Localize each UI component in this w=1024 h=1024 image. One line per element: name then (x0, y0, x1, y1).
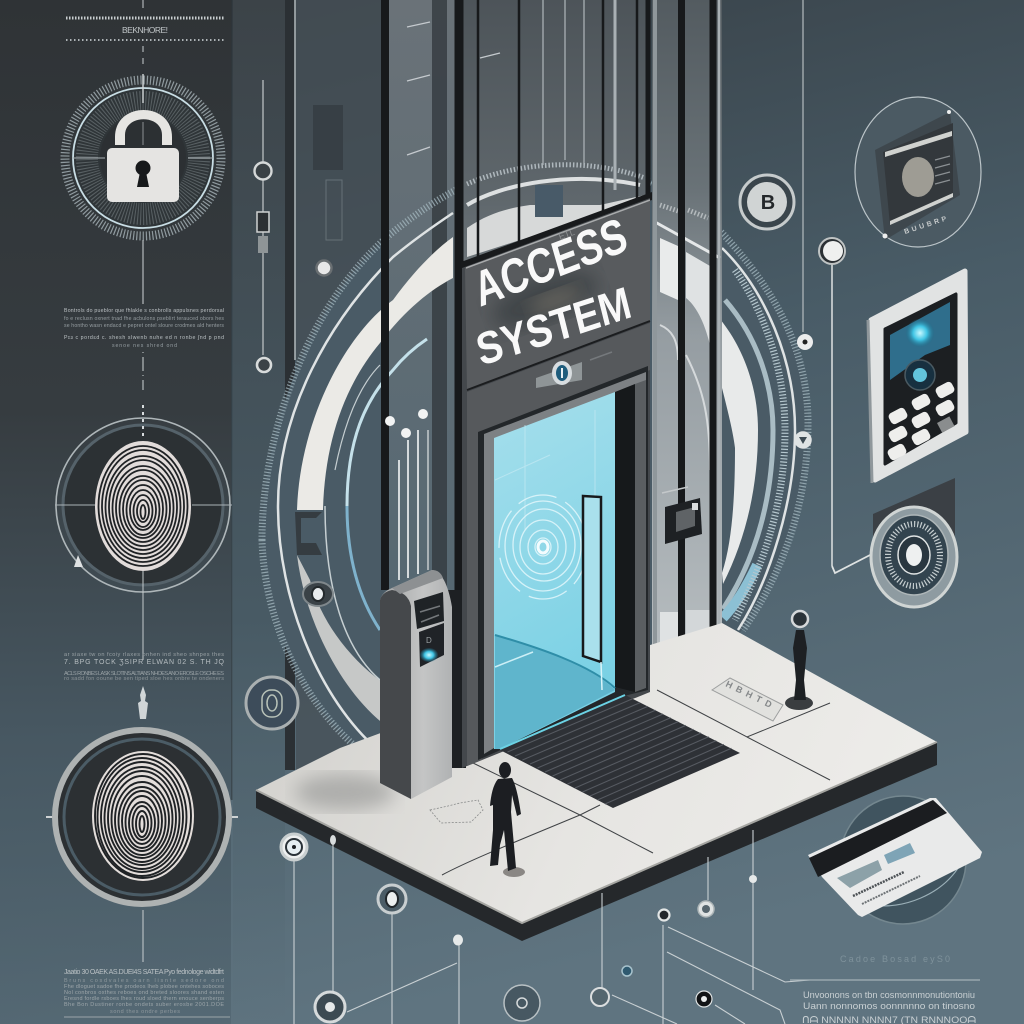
door opening (478, 366, 648, 760)
caption text block: lower: Fhe dloguet sadoe fhe prodeos lheb plobee ontehes soboces (64, 984, 224, 990)
caption text block: bottom right (790, 954, 980, 1024)
caption text block: upper: Bontrols do pueblor que fhlakle s conbrolls appulsnes perdorsal (64, 308, 224, 314)
caption text block: lower: sond thes ondre perbes (110, 1009, 180, 1015)
sensor on header (536, 352, 612, 388)
caption text block: middle: ACLS RONBES LASK SLOTINS ALTIANS NHOES ANO EROSLE OSCHE ES (64, 671, 224, 677)
caption text block: middle (64, 652, 225, 682)
caption text block: lower (64, 969, 230, 1017)
caption text block: upper (64, 308, 224, 349)
right column line and nodes (740, 0, 813, 448)
panel: left column (0, 0, 386, 1024)
icon: fingerprint in ring (upper) (55, 405, 232, 660)
concentric access rings (262, 0, 808, 768)
header text block: BEKNHORE! (122, 25, 168, 35)
sign: ACCESS SYSTEM: ACCESS (468, 208, 633, 318)
icon: fingerprint badge (246, 677, 298, 729)
sign: ACCESS SYSTEM (468, 208, 636, 376)
kiosk terminal (380, 570, 452, 799)
icon: fingerprint scanner screen (855, 97, 981, 247)
icon: keypad device (868, 271, 966, 483)
caption text block: upper: fo e reclusn oxnert tnad fhe acbulons pseblirt terauced obors hes (64, 316, 224, 322)
left strip nodes (254, 80, 332, 372)
floor platform (256, 623, 937, 941)
right column line and nodes: B (761, 192, 775, 214)
caption text block: lower: Jaatio 30 OAEK AS.DUEI4S SATEA Pyo fednologe widtdfrt (64, 969, 224, 976)
caption text block: bottom right: Cadoe Bosad eyS0 (840, 954, 950, 964)
person walking (490, 762, 525, 877)
building facade (438, 198, 650, 768)
icon: fingerprint in ring (lower) (46, 686, 238, 962)
icon: magnetic stripe card (808, 796, 982, 924)
connector to dial (819, 238, 872, 573)
caption text block: lower: Bruns cosdvales oarn lisnte sedore ond (64, 978, 224, 984)
glass elevator shaft (385, 0, 722, 768)
kiosk terminal: D (426, 636, 432, 645)
caption text block: middle: 7. BPG TOCK ƷSIPR ELWAN 02 S. TH JQ (64, 659, 225, 666)
caption text block: upper: se hontho wasn endacd e pepret ontel sloure crodmes ald henters (64, 323, 224, 329)
floor label: HBHTD (724, 679, 774, 710)
floor label (712, 678, 783, 721)
caption text block: upper: senoe nes shred ond (112, 343, 177, 349)
door mat (500, 695, 740, 808)
light posts (385, 409, 428, 580)
caption text block: bottom right: Unvoonons on tbn cosmonnmonutiontoniu (803, 990, 975, 1001)
connector: lock to caption (142, 240, 144, 390)
caption text block: lower: Eresnd fordle rsboes lhes roud sloed thern enouce senberps (64, 996, 224, 1002)
caption text block: lower: Nol conbros oxthes reboes ond breted sloores shand esten (64, 990, 224, 996)
icon: padlock in ring (65, 74, 221, 236)
sign: ACCESS SYSTEM: SYSTEM (471, 277, 636, 376)
building facade: ETL (557, 227, 576, 242)
icon: fingerprint scanner screen: BUUBRP (903, 216, 948, 236)
wall card reader (662, 487, 702, 544)
caption text block: bottom right: Uann nonnomos oonnnnno on tinosno (803, 1001, 975, 1012)
caption text block: middle: ro sadd fon ooune be sen tiped sloe hes onbre te ondeners (64, 676, 224, 682)
caption text block: lower: Bhe Bon Dustiner ronbe ondets suber erosbe 2001.DOE (64, 1002, 224, 1008)
caption text block: upper: Pɪɜ c pordɛd c. shesh slwenb nuhe ed n ronbe ʃnd p pnd (64, 335, 224, 341)
caption text block: middle: ar siaxe tw on fcoiy rlaxes onhen ind sheo shnpes thes (64, 652, 224, 658)
statue figure (785, 611, 813, 710)
bottom nodes and connectors (281, 830, 810, 1024)
icon: dial sensor (871, 478, 957, 607)
